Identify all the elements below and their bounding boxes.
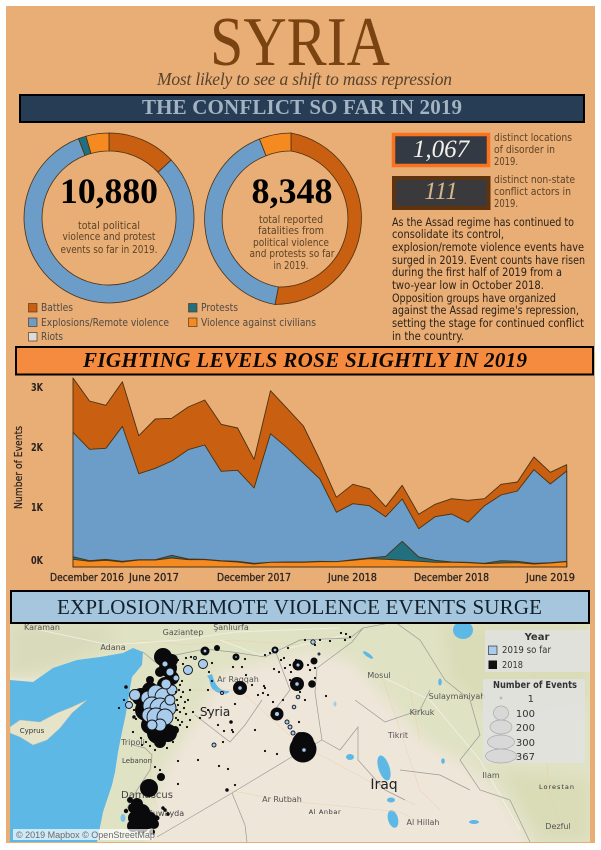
stat label: locations: of disorder in [494, 144, 555, 156]
banner: fighting levels [16, 347, 593, 374]
banner: explosion/remote violence [11, 591, 589, 623]
summary paragraph [392, 215, 585, 343]
area: battles [73, 378, 567, 567]
map labels: Ilam [482, 771, 500, 780]
stat label: actors [494, 174, 575, 210]
summary paragraph: in the country. [392, 329, 464, 343]
y axis labels: 3K [31, 382, 44, 394]
map labels: Sulaymaniyah [429, 692, 485, 701]
map labels: Dezful [545, 822, 571, 831]
map labels: Mosul [367, 671, 391, 680]
stat label: actors: 2019. [494, 198, 518, 210]
legend: year: 2018 [502, 660, 523, 671]
area chart [13, 378, 575, 584]
map labels: Tikrit [387, 731, 408, 740]
map labels: Iraq [370, 777, 398, 793]
donut caption [60, 220, 158, 256]
map base land [10, 623, 590, 842]
fatalities caption: in 2019. [274, 260, 308, 272]
legend: number of events: 367 [516, 752, 535, 763]
legend: number of events: 1 [528, 694, 534, 705]
summary paragraph: consolidate its control, [392, 227, 504, 241]
map lakes [120, 621, 479, 829]
legend: year [485, 630, 590, 672]
map labels: Ar Rutbah [262, 795, 302, 804]
legend: number of events: 200 [516, 723, 535, 734]
map labels: Cyprus [20, 727, 45, 735]
summary paragraph: Opposition groups have organized [392, 291, 556, 305]
stat label: actors: conflict actors in [494, 186, 571, 198]
summary paragraph: during the first half of 2019 from a [392, 265, 562, 279]
legend: year: Year [524, 632, 549, 643]
map white roads [40, 628, 520, 830]
subtitle: Most likely to see a shift to mass repression [156, 69, 452, 89]
legend: event types: Riots [41, 331, 63, 343]
banner: the conflict so far in 2019 [20, 95, 584, 122]
x axis labels: December 2016 [50, 572, 124, 584]
fatalities caption: and protests so far [250, 248, 335, 260]
x axis labels: December 2017 [217, 572, 291, 584]
legend: number of events [483, 679, 585, 763]
stat box: locations [394, 134, 488, 166]
y axis labels [31, 382, 44, 567]
area: protests [73, 541, 567, 567]
map land: Cyprus [10, 700, 87, 745]
map labels: Al Anbar [309, 808, 341, 816]
stat label: actors: distinct non-state [494, 174, 575, 186]
area: explosions [73, 426, 567, 567]
stat box: actors [394, 178, 488, 208]
total number: 10,880 [60, 171, 158, 211]
fatalities caption: political violence [253, 237, 329, 249]
stat label: locations: distinct locations [494, 132, 572, 144]
map borders [125, 622, 530, 842]
map labels [20, 623, 575, 831]
summary paragraph: two-year low in October 2018. [392, 278, 544, 292]
stat box: locations: 1,067 [413, 136, 471, 163]
y axis labels: 1K [31, 502, 44, 514]
legend: year: 2019 so far [502, 645, 552, 656]
legend: event types: Violence against civilians [201, 317, 316, 329]
legend: event types: Protests [201, 302, 238, 314]
y axis title: Number of Events [13, 426, 25, 509]
x axis labels: June 2018 [327, 572, 377, 584]
map labels: Lebanon [122, 757, 152, 765]
map data: small scattered events [119, 633, 350, 785]
title: SYRIA [210, 4, 390, 81]
map labels: Lorestan [539, 783, 575, 791]
x axis labels [50, 572, 575, 584]
x axis labels: June 2017 [128, 572, 179, 584]
area: violence against civilians [73, 558, 567, 567]
legend: event types: Battles [41, 302, 73, 314]
map sea [10, 648, 143, 842]
map labels: Suwayda [148, 809, 184, 818]
donut: total events [24, 133, 194, 303]
donut caption: total political [78, 220, 140, 232]
map labels: Ar Raqqah [217, 675, 259, 684]
donut caption: events so far in 2019. [60, 244, 158, 256]
legend: event types [28, 302, 316, 343]
legend: number of events: Number of Events [493, 680, 577, 691]
stat label: locations [494, 132, 572, 168]
legend: number of events: 300 [516, 738, 535, 749]
legend: event types: Explosions/Remote violence [41, 317, 169, 329]
map data: 2018 large black bubbles [124, 645, 318, 835]
map labels: Gaziantep [163, 628, 203, 637]
legend: number of events: 100 [516, 709, 535, 720]
x axis labels: December 2018 [414, 572, 489, 584]
map data: 2019 blue bubbles [126, 640, 320, 752]
banner: the conflict so far in 2019: THE CONFLICT SO FAR IN 2019 [142, 95, 462, 119]
map labels: Karaman [24, 623, 60, 632]
map roads [113, 640, 560, 825]
map labels: Al Hillah [407, 818, 439, 827]
donut caption: violence and protest [62, 231, 156, 243]
y axis labels: 0K [31, 555, 44, 567]
stat box: actors: 111 [424, 178, 458, 205]
banner: explosion/remote violence: EXPLOSION/REMOTE VIOLENCE EVENTS SURGE [57, 595, 542, 619]
map attribution: © 2019 Mapbox © OpenStreetMap [16, 830, 155, 840]
donut: total fatalities [205, 133, 361, 304]
map labels: Adana [100, 643, 126, 652]
x axis labels: June 2019 [525, 572, 575, 584]
y axis labels: 2K [31, 442, 44, 454]
map green regions [10, 624, 590, 842]
map labels: Kirkuk [410, 708, 435, 717]
map labels: Tripoli [120, 738, 145, 747]
banner: fighting levels: FIGHTING LEVELS ROSE SLIGHTLY IN 2019 [82, 348, 528, 372]
map labels: Syria [200, 705, 230, 719]
fatalities number: 8,348 [252, 171, 332, 211]
map [10, 624, 590, 842]
fatalities caption: total reported [259, 214, 323, 226]
fatalities caption [250, 214, 335, 272]
fatalities caption: fatalities from [258, 225, 324, 237]
stat label: locations: 2019. [494, 156, 518, 168]
map labels: Damascus [121, 790, 173, 801]
map labels: Şanlıurfa [213, 623, 249, 632]
